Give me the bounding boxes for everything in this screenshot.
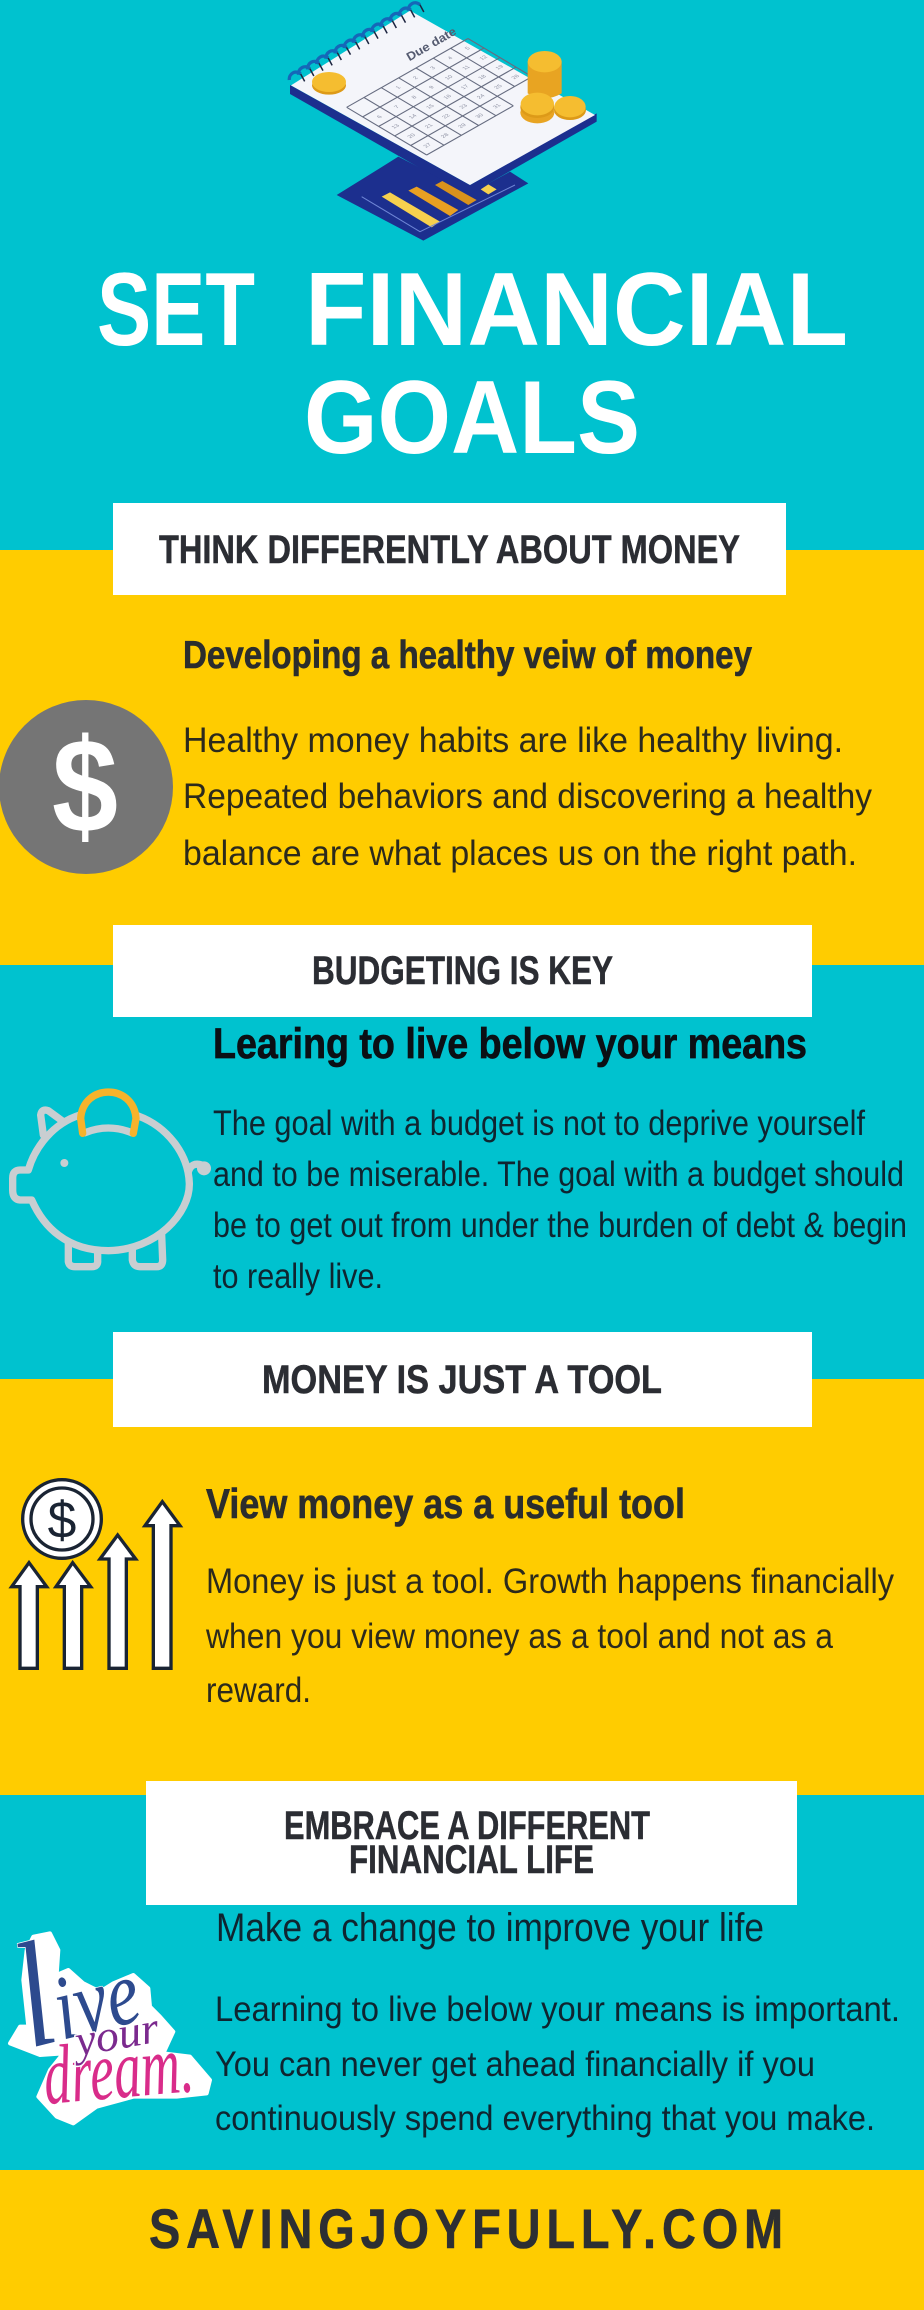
icon: piggy bank (13, 1092, 209, 1267)
title: SET (97, 252, 255, 368)
title: FINANCIAL (305, 252, 848, 368)
panel: budgeting is key (13, 925, 907, 1296)
panel: money is just a tool (12, 1332, 894, 1710)
icon: coin and growth arrows (12, 1480, 180, 1668)
title: GOALS (304, 360, 640, 476)
panel: think differently about money (0, 503, 872, 874)
bar chart sheet (337, 157, 528, 241)
subheading: Developing a healthy veiw of money (183, 634, 752, 677)
icon: live your dream sticker: dream. (40, 2017, 197, 2123)
coins (312, 51, 586, 123)
body text: reward. (206, 1671, 311, 1710)
heading box: BUDGETING IS KEY (312, 949, 613, 993)
heading box (113, 925, 812, 1017)
body text (183, 721, 872, 873)
heading box: EMBRACE A DIFFERENT (284, 1804, 650, 1848)
icon: live your dream sticker: live (0, 1890, 152, 2080)
heading box: FINANCIAL LIFE (349, 1838, 594, 1882)
subheading: View money as a useful tool (206, 1480, 685, 1527)
heading box: THINK DIFFERENTLY ABOUT MONEY (159, 528, 740, 572)
body text: Money is just a tool. Growth happens financially (206, 1562, 894, 1601)
heading box (146, 1781, 797, 1905)
body text (213, 1104, 907, 1296)
body text: Healthy money habits are like healthy living. (183, 721, 843, 760)
body text: balance are what places us on the right path. (183, 834, 857, 873)
icon: dollar circle (0, 700, 173, 874)
body text: You can never get ahead financially if you (215, 2045, 815, 2084)
heading box (113, 503, 786, 595)
icon: calendar with coins and bar chart (289, 3, 597, 241)
subheading: Make a change to improve your life (216, 1906, 764, 1950)
body text: Repeated behaviors and discovering a healthy (183, 777, 872, 816)
subheading: Learing to live below your means (213, 1020, 807, 1068)
icon: coin and growth arrows: $ (48, 1490, 76, 1548)
icon: live your dream sticker: your (67, 2003, 163, 2067)
body text: when you view money as a tool and not as a (205, 1617, 833, 1656)
calendar page (289, 3, 597, 194)
icon: live your dream sticker (0, 1890, 210, 2123)
body text (205, 1562, 894, 1710)
footer website: SAVINGJOYFULLY.COM (149, 2197, 789, 2260)
calendar page: Due date (404, 24, 459, 64)
heading box: MONEY IS JUST A TOOL (262, 1358, 662, 1402)
body text: to really live. (213, 1257, 383, 1296)
title (97, 252, 848, 476)
heading box (113, 1332, 812, 1427)
body text (215, 1990, 900, 2138)
icon: dollar circle: $ (52, 712, 118, 861)
body text: continuously spend everything that you make. (215, 2099, 875, 2138)
panel: embrace a different financial life (0, 1781, 900, 2138)
